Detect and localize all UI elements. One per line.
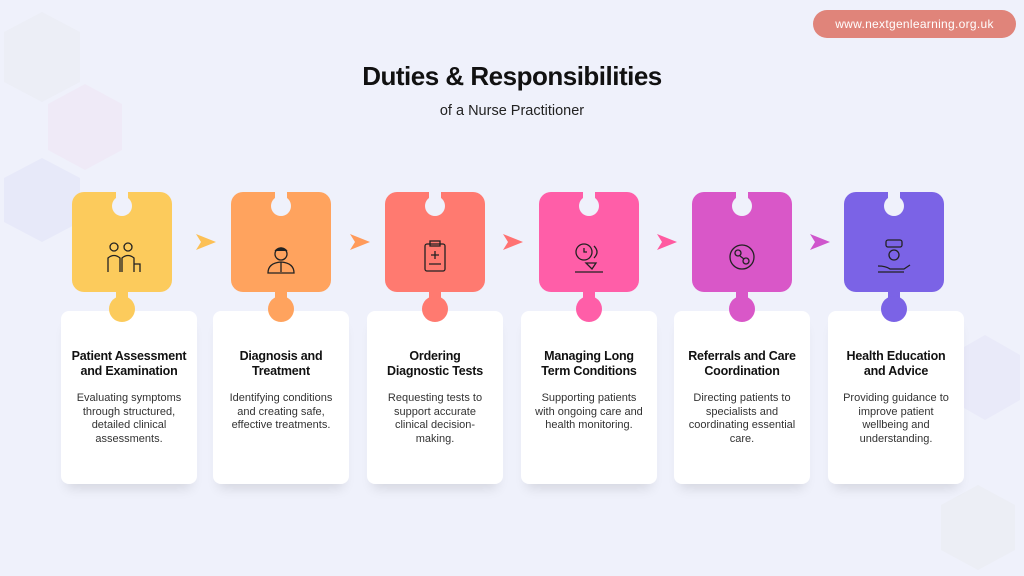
website pill: www.nextgenlearning.org.uk [835,17,994,31]
icon: clipboard [425,241,445,271]
card: diagnosis [213,311,349,484]
card: patient assessment: Evaluating symptoms through structured, detailed clinical assessments. [77,392,181,444]
website pill [813,10,1016,38]
card: health education [828,311,964,484]
icon: clock hand [575,244,603,272]
card: patient assessment: and Examination [80,364,178,378]
title: Duties & Responsibilities [362,61,662,91]
puzzle: orange [231,192,331,322]
card: ordering tests: Requesting tests to support accurate clinical decision-making. [388,392,482,444]
icon: people [108,243,140,272]
card: long term conditions: Term Conditions [541,364,637,378]
puzzle: pink [539,192,639,322]
card: referrals: Referrals and Care [688,349,796,363]
card: health education: Providing guidance to improve patient wellbeing and understanding. [843,392,949,444]
card: referrals: Directing patients to specialists and coordinating essential care. [689,392,795,444]
puzzle: magenta [692,192,792,322]
arrow 1 [196,234,216,250]
arrow 4 [657,234,677,250]
card: referrals: Coordination [704,364,780,378]
card: patient assessment: Patient Assessment [72,349,186,363]
puzzle: yellow [72,192,172,322]
icon: doctor [268,248,294,273]
card: ordering tests [367,311,503,484]
arrow 3 [503,234,523,250]
card: patient assessment [61,311,197,484]
card: diagnosis: Identifying conditions and creating safe, effective treatments. [230,392,332,431]
subtitle: of a Nurse Practitioner [440,103,584,119]
puzzle: purple [844,192,944,322]
icon: network [730,245,754,269]
card: long term conditions: Supporting patients with ongoing care and health monitoring. [535,392,643,431]
puzzle: salmon [385,192,485,322]
arrow 5 [810,234,830,250]
card: diagnosis: Treatment [252,364,310,378]
icon: hand with head [878,240,910,272]
arrow 2 [350,234,370,250]
card: referrals [674,311,810,484]
card: ordering tests: Diagnostic Tests [387,364,483,378]
card: health education: and Advice [864,364,928,378]
card: health education: Health Education [847,349,945,363]
card: long term conditions [521,311,657,484]
card: diagnosis: Diagnosis and [240,349,322,363]
card: ordering tests: Ordering [409,349,461,363]
card: long term conditions: Managing Long [544,349,634,363]
